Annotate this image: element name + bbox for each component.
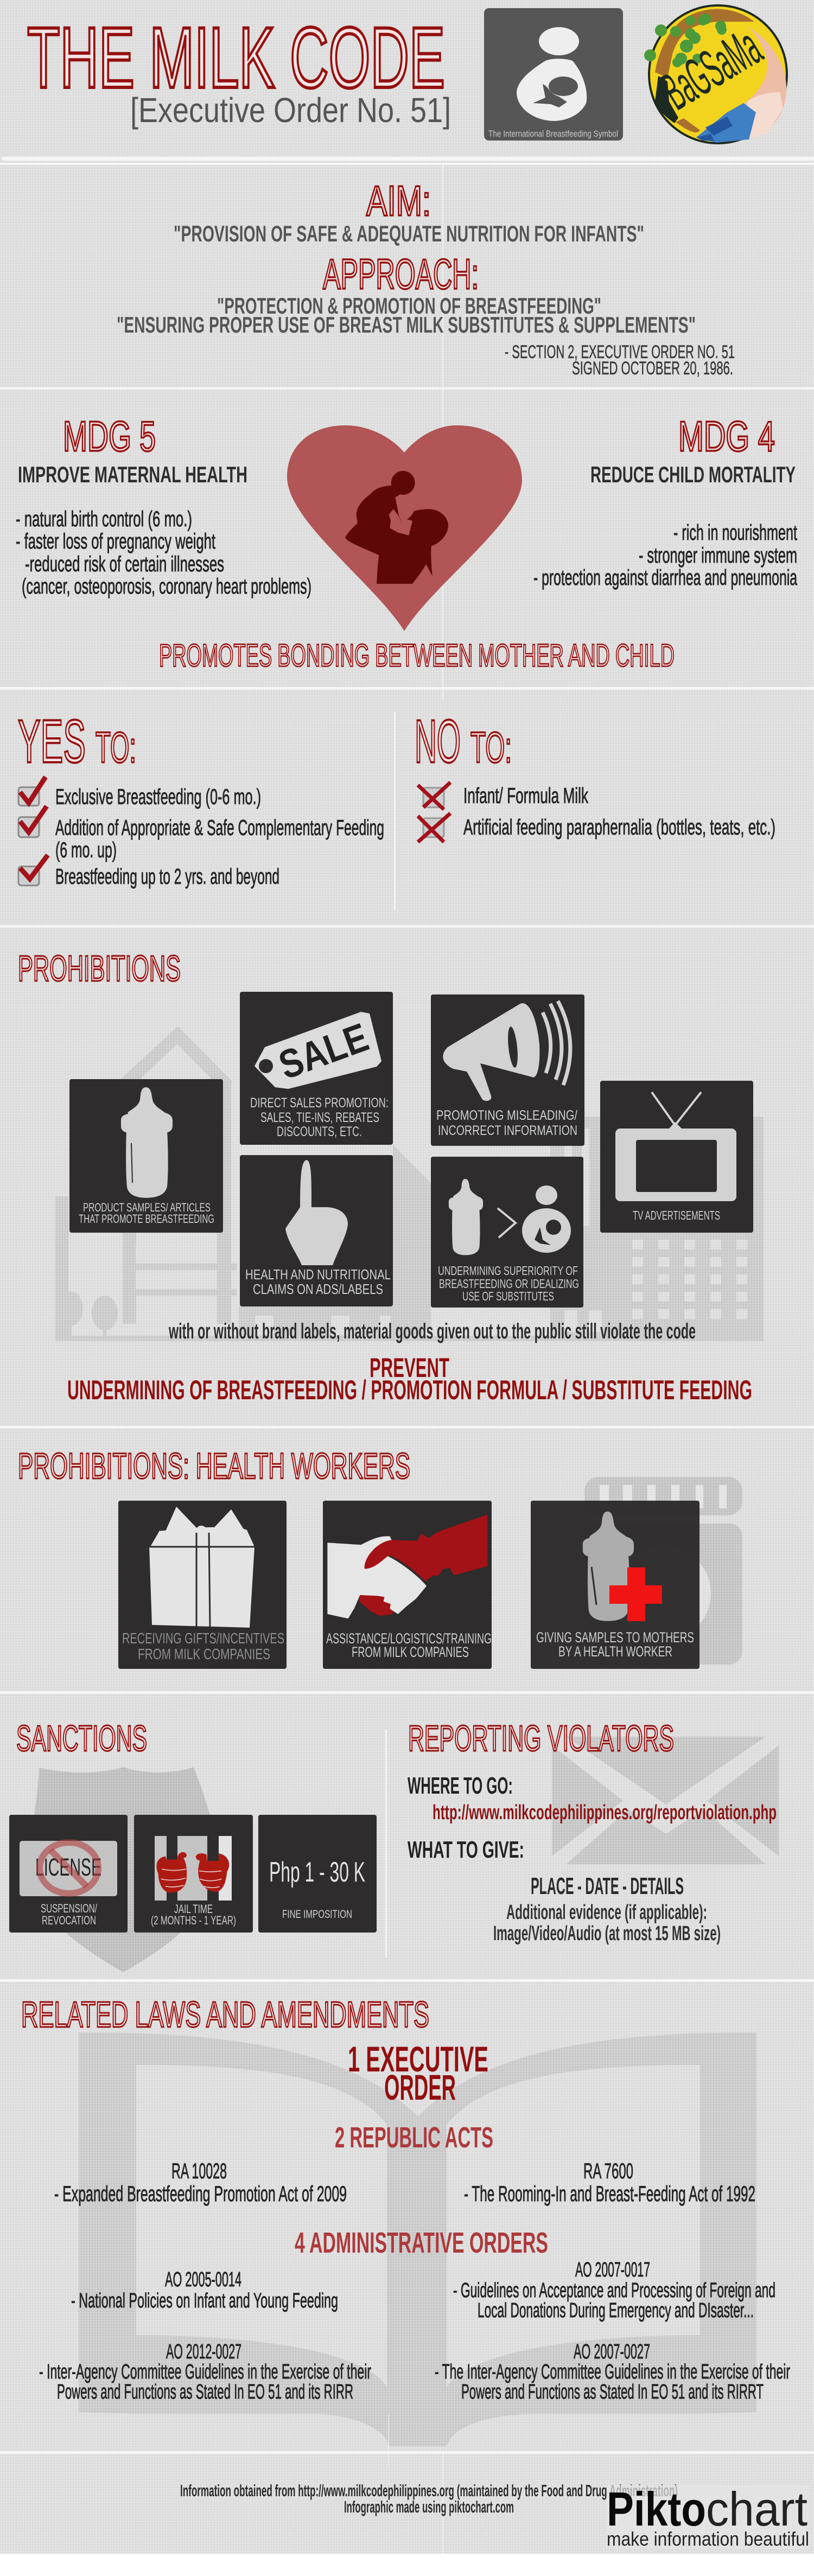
icon: check 3 — [18, 855, 48, 885]
RA 10028: RA 10028 — [171, 2159, 227, 2183]
card: fine imposition: Php 1 - 30 K — [269, 1857, 365, 1888]
icon: cross 1 — [418, 782, 450, 809]
panel: yes and no — [18, 707, 775, 889]
panel: MDG goals — [16, 412, 797, 673]
RA 10028 — [54, 2159, 347, 2206]
card: product samples — [69, 1079, 223, 1233]
RA 7600 — [464, 2159, 755, 2206]
card: giving samples: BY A HEALTH WORKER — [558, 1643, 672, 1660]
card: fine imposition — [258, 1815, 377, 1933]
card: TV advertisements — [600, 1081, 753, 1233]
card: direct sales promotion — [240, 992, 393, 1145]
panel: prohibitions — [18, 948, 753, 1405]
subtitle: [Executive Order No. 51] — [130, 91, 451, 130]
RA 7600: RA 7600 — [583, 2159, 633, 2183]
panel: related laws — [21, 1994, 790, 2403]
AO 2012-0027: AO 2012-0027 — [166, 2341, 241, 2363]
count: executive order: ORDER — [384, 2067, 456, 2107]
approach quote 1: "PROTECTION & PROMOTION OF BREASTFEEDING" — [217, 293, 601, 318]
card: assistance — [323, 1501, 492, 1669]
additional evidence — [493, 1901, 721, 1945]
heading: sanctions: SANCTIONS — [16, 1718, 147, 1759]
card: misleading information — [431, 994, 584, 1146]
heading: MDG 5: MDG 5 — [63, 412, 156, 460]
AO 2007-0027 — [435, 2341, 790, 2403]
card: product samples: THAT PROMOTE BREASTFEEDING — [79, 1212, 214, 1226]
card: misleading information: INCORRECT INFORMATION — [438, 1123, 577, 1138]
AO 2005-0014: - National Policies on Infant and Young Feeding — [71, 2290, 338, 2312]
citation — [505, 342, 735, 379]
yes item 2: Addition of Appropriate & Safe Complementary Feeding — [55, 816, 384, 840]
card: direct sales promotion: DISCOUNTS, ETC. — [277, 1124, 362, 1139]
card: license suspension: SUSPENSION/ — [41, 1902, 98, 1915]
AO 2012-0027: Powers and Functions as Stated In EO 51 and its RIRR — [57, 2381, 353, 2403]
count: administrative orders: 4 ADMINISTRATIVE ORDERS — [295, 2227, 548, 2259]
card: undermining superiority: USE OF SUBSTITUTES — [462, 1289, 554, 1303]
AO 2005-0014 — [71, 2268, 338, 2312]
card: direct sales promotion: SALE — [273, 1015, 374, 1088]
Piktochart logo — [607, 2482, 810, 2550]
no item 1: Infant/ Formula Milk — [463, 784, 589, 808]
card: health claims — [240, 1155, 393, 1306]
heading: MDG 4: MDG 4 — [678, 412, 775, 460]
card: direct sales promotion: SALES, TIE-INS, REBATES — [260, 1110, 379, 1125]
heading: aim: AIM: — [366, 177, 431, 225]
source credits — [180, 2481, 678, 2516]
card: TV advertisements: TV ADVERTISEMENTS — [633, 1208, 720, 1222]
card: health claims: HEALTH AND NUTRITIONAL — [245, 1266, 391, 1283]
label: what to give: WHAT TO GIVE: — [408, 1837, 524, 1863]
AO 2007-0017: AO 2007-0017 — [575, 2259, 650, 2281]
yes item 3: Breastfeeding up to 2 yrs. and beyond — [55, 865, 279, 889]
icon: check 1 — [18, 777, 46, 806]
heading: approach: APPROACH: — [323, 250, 479, 298]
card: assistance: ASSISTANCE/LOGISTICS/TRAINING — [326, 1630, 492, 1647]
background art: envelope — [552, 1737, 779, 1864]
card: giving samples — [531, 1501, 699, 1669]
panel: sanctions — [9, 1718, 377, 1933]
AO 2005-0014: AO 2005-0014 — [165, 2268, 241, 2291]
icon: Bagsama logo — [644, 5, 787, 143]
heading: prohibitions: PROHIBITIONS — [18, 948, 181, 989]
benefits list: mother: - faster loss of pregnancy weight — [16, 530, 215, 553]
icon: international breastfeeding symbol: The International Breastfeeding Symbol — [488, 129, 618, 139]
citation: SIGNED OCTOBER 20, 1986. — [572, 358, 733, 379]
panel: reporting violators — [408, 1718, 777, 1945]
card: license suspension: LICENSE — [35, 1853, 101, 1881]
benefits list: mother: -reduced risk of certain illnesses — [25, 552, 224, 576]
card: undermining superiority: BREASTFEEDING OR IDEALIZING — [439, 1277, 579, 1291]
count: republic acts: 2 REPUBLIC ACTS — [335, 2121, 493, 2154]
card: jail time: (2 MONTHS - 1 YEAR) — [151, 1914, 236, 1927]
yes item 2 — [55, 816, 384, 862]
card: assistance: FROM MILK COMPANIES — [352, 1644, 469, 1660]
card: gifts: RECEIVING GIFTS/INCENTIVES — [122, 1630, 284, 1647]
card: direct sales promotion: DIRECT SALES PROMOTION: — [250, 1095, 389, 1111]
background art: washing machine — [584, 1477, 742, 1665]
background art: city buildings — [55, 1035, 764, 1341]
required details: PLACE - DATE - DETAILS — [531, 1873, 684, 1899]
card: license suspension — [9, 1815, 128, 1933]
count: executive order — [348, 2039, 488, 2107]
benefits list: child — [533, 521, 797, 590]
card: jail time: JAIL TIME — [174, 1902, 213, 1916]
card: misleading information: PROMOTING MISLEADING/ — [436, 1108, 577, 1123]
benefits list: mother — [16, 507, 311, 598]
callout: prevent — [67, 1353, 752, 1405]
background art: open book — [79, 2032, 756, 2446]
card: jail time — [134, 1815, 253, 1933]
heading: related laws: RELATED LAWS AND AMENDMENTS — [21, 1994, 429, 2035]
benefits list: mother: - natural birth control (6 mo.) — [16, 507, 192, 531]
Piktochart logo: Pikto — [607, 2482, 706, 2536]
heading: no to: TO: — [470, 723, 512, 771]
subheading: improve maternal health: IMPROVE MATERNAL HEALTH — [18, 462, 247, 487]
icon: heart with mother and child — [287, 425, 522, 631]
yes item 1: Exclusive Breastfeeding (0-6 mo.) — [55, 785, 261, 809]
heading: yes to: YES — [18, 707, 86, 775]
Piktochart logo: chart — [706, 2482, 807, 2536]
panel: health workers — [18, 1446, 699, 1669]
heading: no to: NO — [415, 707, 461, 775]
AO 2007-0027: AO 2007-0027 — [574, 2341, 650, 2363]
header panel — [27, 5, 787, 143]
card: gifts: FROM MILK COMPANIES — [138, 1646, 270, 1662]
card: undermining superiority: UNDERMINING SUPERIORITY OF — [438, 1264, 578, 1278]
icon: international breastfeeding symbol — [484, 8, 623, 141]
label: where to go: WHERE TO GO: — [408, 1772, 513, 1799]
card: giving samples: GIVING SAMPLES TO MOTHERS — [536, 1629, 694, 1646]
panel: aim and approach — [117, 177, 735, 379]
card: license suspension: REVOCATION — [42, 1914, 96, 1927]
source credits: Infographic made using piktochart.com — [344, 2497, 514, 2516]
AO 2012-0027 — [39, 2341, 371, 2403]
icon: cross 2 — [418, 813, 450, 842]
background art: shield — [29, 1767, 218, 1972]
card: product samples: PRODUCT SAMPLES/ ARTICLES — [83, 1201, 211, 1214]
AO 2007-0017 — [453, 2259, 775, 2322]
background art: building windows — [136, 1128, 747, 1335]
card: fine imposition: FINE IMPOSITION — [282, 1908, 352, 1921]
count: executive order: 1 EXECUTIVE — [348, 2039, 488, 2079]
heading: yes to: TO: — [96, 723, 136, 771]
heading: prohibitions health workers: PROHIBITIONS: HEALTH WORKERS — [18, 1446, 410, 1487]
card: gifts — [118, 1501, 287, 1669]
card: health claims: CLAIMS ON ADS/LABELS — [253, 1281, 383, 1297]
benefits list: mother: (cancer, osteoporosis, coronary heart problems) — [22, 575, 311, 598]
icon: check 2 — [18, 806, 47, 837]
footer — [180, 2481, 810, 2550]
AO 2012-0027: - Inter-Agency Committee Guidelines in the Exercise of their — [39, 2361, 371, 2383]
title: THE MILK CODE — [27, 9, 445, 106]
card: undermining superiority — [431, 1157, 583, 1308]
callout: prevent: PREVENT — [370, 1353, 449, 1383]
yes item 2: (6 mo. up) — [55, 838, 117, 862]
RA 10028: - Expanded Breastfeeding Promotion Act of 2009 — [54, 2182, 347, 2206]
